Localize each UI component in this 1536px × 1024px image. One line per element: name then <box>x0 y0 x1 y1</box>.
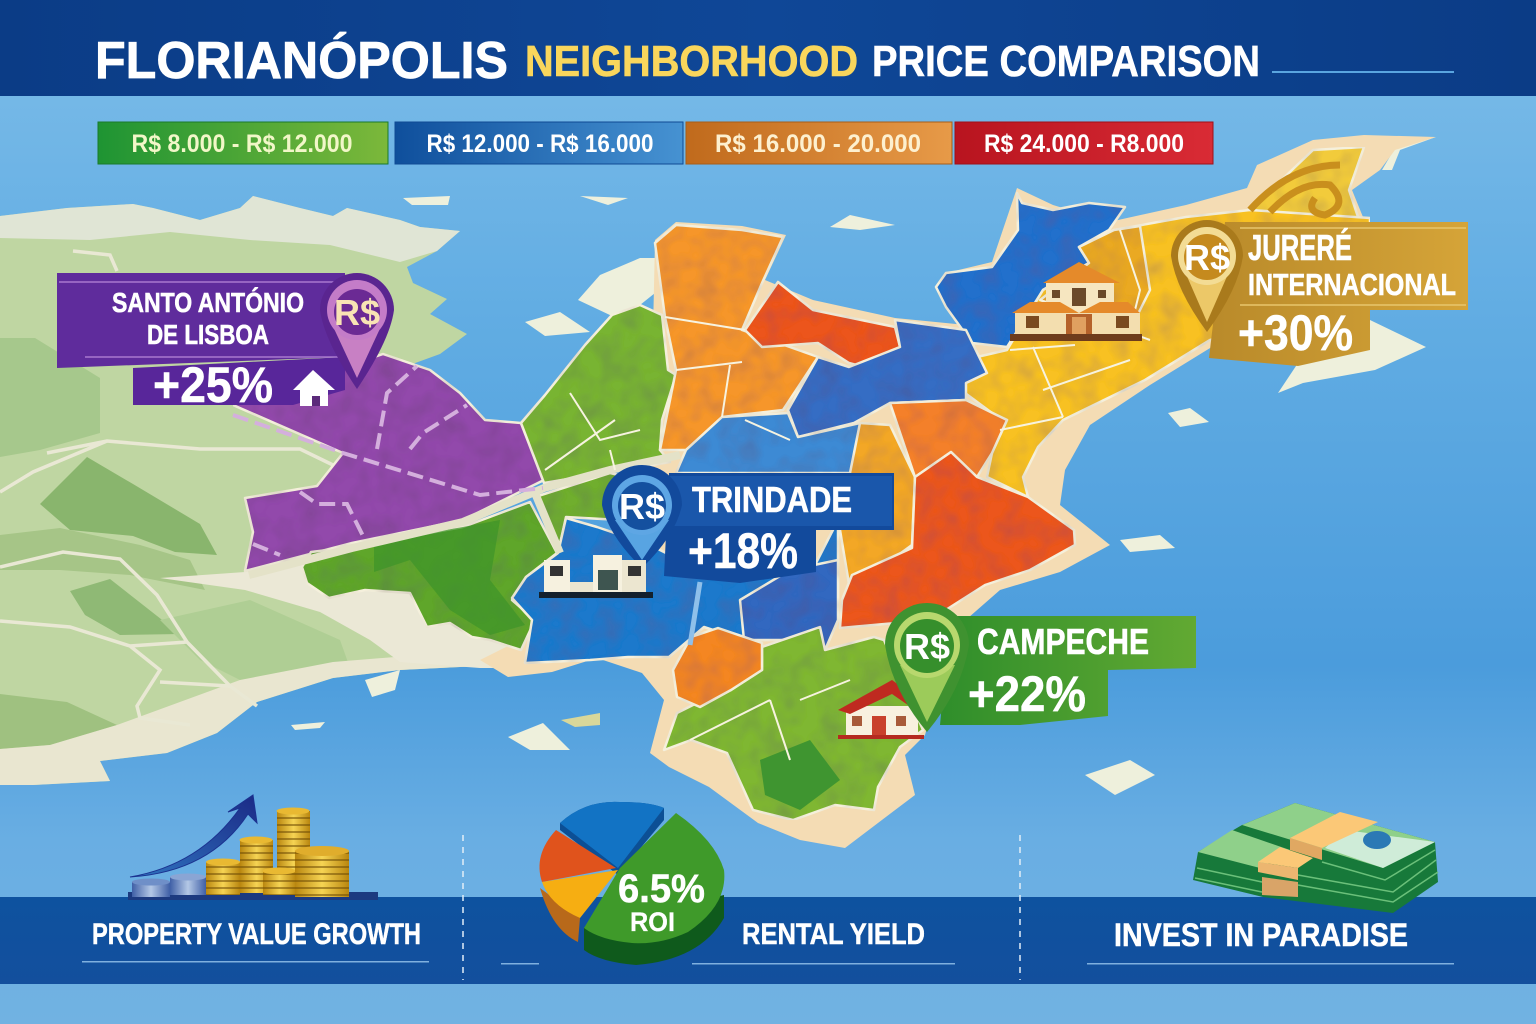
icon: purple pin <box>320 273 394 389</box>
legend: orange range <box>686 122 952 164</box>
icon: green pin: R$ <box>904 626 950 667</box>
region: blue northeast <box>936 193 1125 347</box>
region: yellow-orange east <box>840 423 915 590</box>
pie chart: ROI: ROI <box>630 907 675 937</box>
region: orange east <box>890 400 1007 477</box>
title: FLORIANÓPOLIS <box>95 32 508 90</box>
legend: green range <box>98 122 388 164</box>
region: swirl headland <box>1250 147 1364 220</box>
swirl decoration <box>1250 165 1340 215</box>
region: green south <box>664 627 923 820</box>
icon: coin stacks and growth arrow <box>128 795 378 900</box>
region: blue north central <box>676 413 875 473</box>
region: yellow northeast <box>961 210 1370 497</box>
dark green forest patch <box>760 740 840 810</box>
title: NEIGHBORHOOD <box>525 37 858 86</box>
text: invest in paradise: INVEST IN PARADISE <box>1114 917 1408 953</box>
icon: white buildings <box>539 555 653 598</box>
region: green west <box>521 305 676 483</box>
dark green southwest patch <box>374 520 525 635</box>
icon: white house <box>293 370 335 406</box>
region: orange south <box>673 628 762 707</box>
legend: red range <box>955 122 1213 164</box>
mainland map <box>0 196 545 785</box>
legend: orange range: R$ 16.000 - 20.000 <box>715 130 921 158</box>
callout: Trindade <box>539 465 894 598</box>
island sand coast <box>480 135 1436 848</box>
icon: gold pin: R$ <box>1184 237 1230 278</box>
callout: Jurerê Internacional: JURERÉ <box>1248 227 1352 268</box>
callout: Santo António de Lisboa: DE LISBOA <box>147 319 269 350</box>
region: red-orange east <box>840 452 1075 628</box>
callout: Jurerê Internacional: INTERNACIONAL <box>1248 267 1456 302</box>
icon: blue pin: R$ <box>619 486 665 527</box>
region: orange north <box>655 225 818 450</box>
pie chart: ROI <box>539 802 724 965</box>
text: rental yield: RENTAL YIELD <box>742 918 925 951</box>
price legend <box>98 122 1213 164</box>
small islands <box>291 137 1436 795</box>
region: green southwest <box>302 502 557 650</box>
icon: purple pin: R$ <box>334 292 380 333</box>
icon: gold pin <box>1171 220 1243 332</box>
legend: blue range <box>395 122 683 164</box>
callout: Jurerê Internacional: +30% <box>1238 305 1353 361</box>
icon: stacks of money <box>1193 803 1438 913</box>
callout: Santo António de Lisboa: SANTO ANTÓNIO <box>112 287 304 318</box>
callout: Campeche: CAMPECHE <box>977 621 1149 662</box>
callout: Trindade: TRINDADE <box>692 479 852 520</box>
title: PRICE COMPARISON <box>872 37 1260 86</box>
region: blue darker southeast <box>740 560 838 650</box>
callout: Campeche: +22% <box>968 666 1086 722</box>
callout: Trindade: +18% <box>688 523 798 579</box>
pie chart: ROI: 6.5% <box>618 867 705 911</box>
legend: red range: R$ 24.000 - R8.000 <box>984 130 1184 158</box>
region: red-orange north <box>745 282 900 367</box>
callout: Jurerê Internacional <box>1010 220 1468 366</box>
icon: blue pin <box>602 465 682 568</box>
region: amber north of yellow <box>1040 226 1150 330</box>
icon: green pin <box>885 603 969 732</box>
callout: Santo António de Lisboa: +25% <box>153 357 273 413</box>
map regions <box>233 147 1370 820</box>
map roads <box>233 230 1150 760</box>
legend: blue range: R$ 12.000 - R$ 16.000 <box>426 130 654 158</box>
region: purple Santo Antonio <box>233 354 544 571</box>
callout: Campeche <box>838 603 1196 739</box>
text: property value growth: PROPERTY VALUE GROWTH <box>92 918 421 951</box>
header band <box>0 0 1536 96</box>
icon: villa <box>1010 262 1142 341</box>
icon: red house <box>838 680 930 739</box>
title <box>95 32 1454 90</box>
callout: Santo António de Lisboa <box>57 273 394 413</box>
legend: green range: R$ 8.000 - R$ 12.000 <box>132 130 352 158</box>
region: blue centre <box>788 320 987 437</box>
footer band <box>0 897 1536 984</box>
region: green central <box>535 473 640 553</box>
region: blue south <box>512 518 838 663</box>
